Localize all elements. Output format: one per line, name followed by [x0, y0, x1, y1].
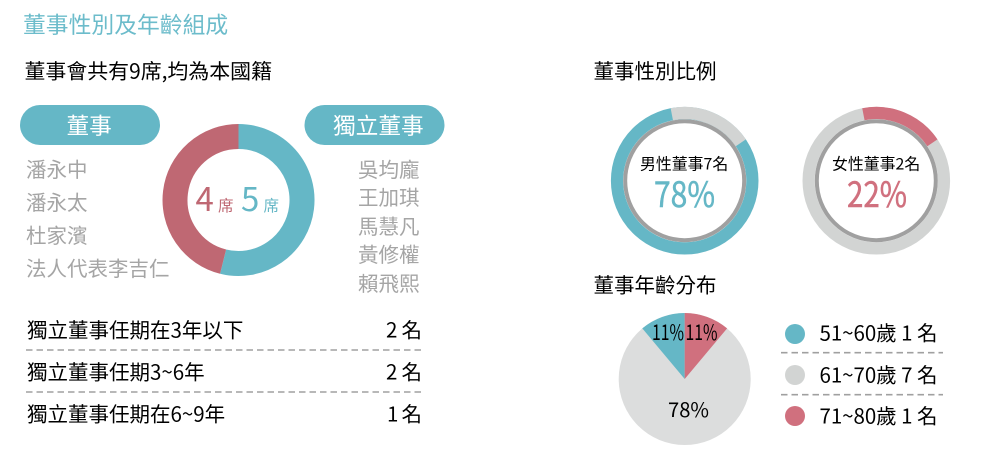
list: independent director tenure: 獨立董事任期在6~9年: [27, 398, 225, 428]
donut chart: seats: 席: [218, 194, 234, 216]
list: independent director tenure: 2 名: [386, 356, 422, 386]
legend item: 51-60: 51~60歲 1 名: [820, 316, 938, 346]
ring chart: female directors: [809, 113, 944, 248]
legend: age groups: [781, 316, 943, 430]
ring chart: male directors: 78%: [654, 167, 715, 218]
donut chart: seats: [175, 136, 302, 264]
ring chart: male directors: 男性董事7名: [640, 152, 728, 174]
pill: directors heading: 董事: [66, 108, 112, 141]
list: independent director tenure: 獨立董事任期在3年以下: [27, 314, 243, 344]
list: independent director names: 黃修權: [358, 238, 420, 268]
list: director names: 杜家濱: [26, 219, 88, 249]
list: independent director tenure: 1 名: [387, 398, 422, 428]
list: independent director tenure: [26, 314, 422, 428]
heading: gender ratio: 董事性別比例: [594, 54, 716, 84]
panel: directors: [20, 105, 170, 282]
list: independent director tenure: 2 名: [386, 314, 422, 344]
pill: independent directors heading: [304, 105, 444, 145]
subtitle: board composition: 董事會共有9席,均為本國籍: [24, 54, 272, 84]
pill: directors heading: [20, 105, 160, 145]
donut chart: seats: 5: [241, 173, 259, 221]
pie chart: age distribution: [619, 313, 751, 445]
ring chart: female directors: 22%: [847, 167, 907, 218]
legend item: 71-80: 71~80歲 1 名: [820, 400, 938, 430]
pie chart: age distribution: 78%: [668, 394, 709, 423]
list: independent director names: 馬慧凡: [358, 210, 420, 240]
ring chart: male directors: [617, 113, 752, 248]
panel: independent directors: [304, 105, 444, 297]
list: independent director tenure: 獨立董事任期3~6年: [27, 356, 205, 386]
donut chart: seats: 4: [196, 173, 214, 221]
list: independent director names: 吳均龐: [358, 153, 420, 183]
list: director names: [26, 153, 170, 282]
list: director names: 潘永中: [26, 153, 88, 183]
heading: age distribution: 董事年齡分布: [594, 268, 716, 298]
list: director names: 潘永太: [26, 186, 88, 216]
list: independent director names: [358, 153, 420, 297]
ring chart: female directors: 女性董事2名: [832, 152, 920, 174]
list: independent director names: 賴飛熙: [358, 267, 420, 297]
list: director names: 法人代表李吉仁: [26, 252, 170, 282]
list: independent director names: 王加琪: [358, 181, 420, 211]
title: 董事性別及年齡組成: [23, 7, 228, 40]
legend item: 61-70: 61~70歲 7 名: [820, 358, 938, 388]
pie chart: age distribution: 11%: [686, 317, 718, 347]
pie chart: age distribution: 11%: [652, 317, 684, 347]
donut chart: seats: 席: [264, 194, 279, 216]
pill: independent directors heading: 獨立董事: [333, 108, 424, 141]
